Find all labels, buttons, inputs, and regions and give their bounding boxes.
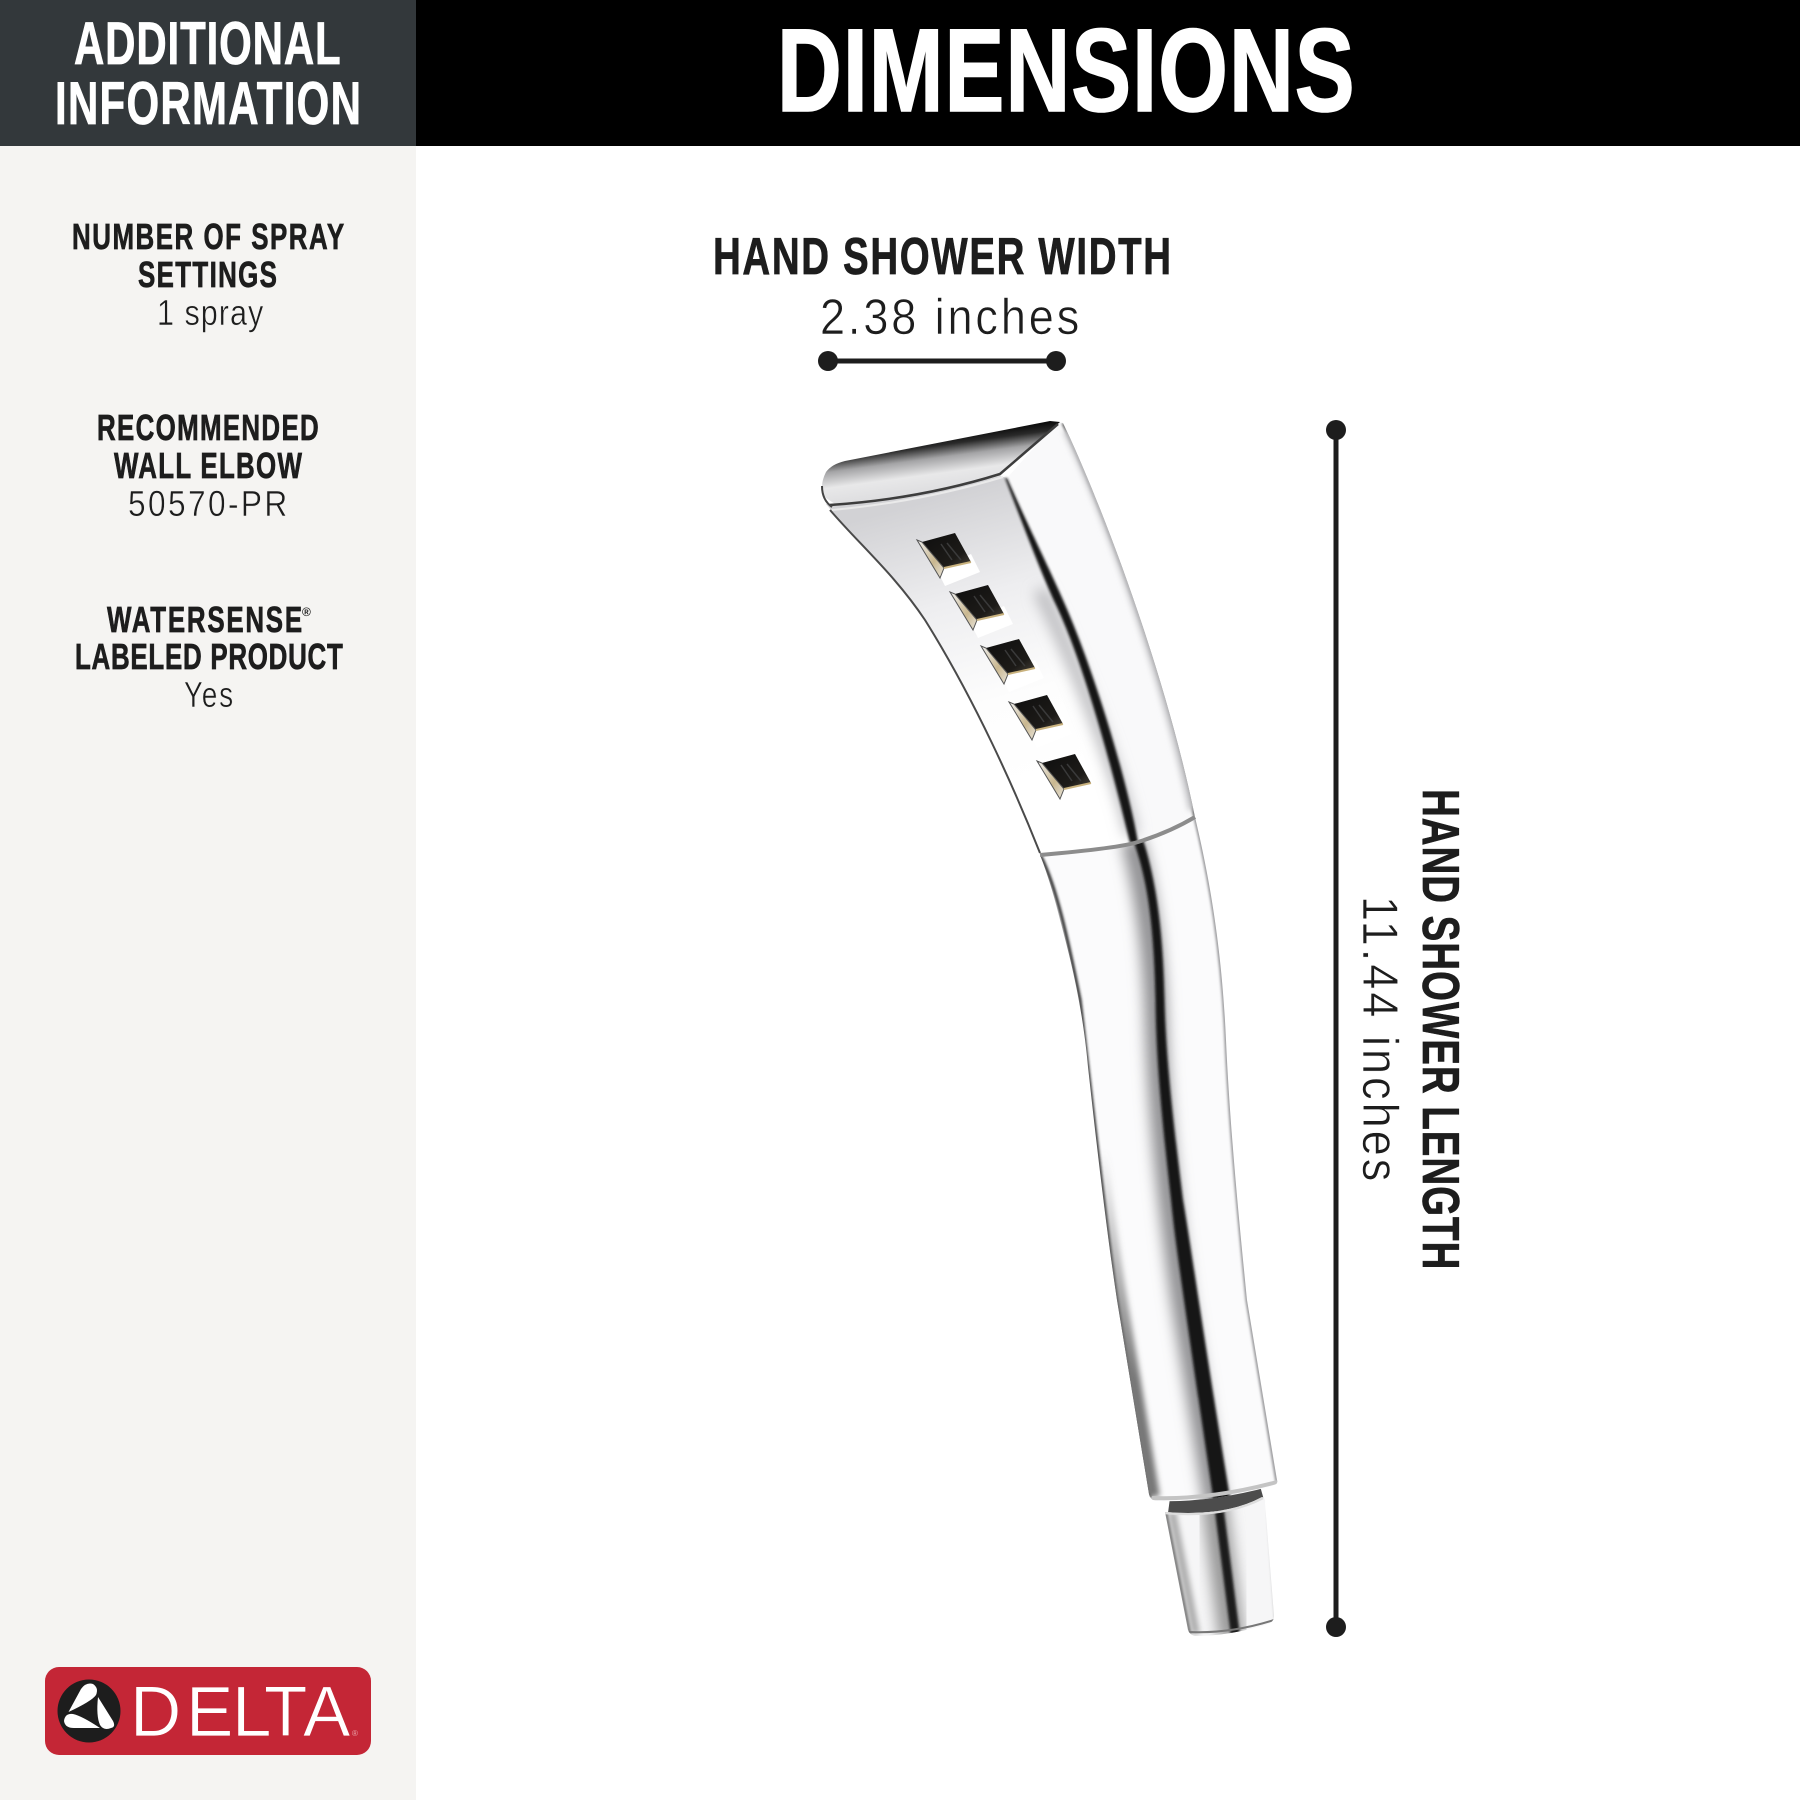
nozzle 4 (1009, 695, 1072, 748)
header: additional information (0, 0, 416, 146)
hand shower product (822, 421, 1277, 1640)
width dimension label: HAND SHOWER WIDTH (713, 227, 1171, 285)
logo: delta: ® (352, 1729, 358, 1738)
spec: number of spray settings: NUMBER OF SPRAY (72, 217, 344, 257)
head top face (822, 421, 1060, 510)
spec: watersense labeled product (75, 600, 343, 715)
logo: delta: DELTA (130, 1673, 351, 1752)
nozzle 1 (917, 533, 980, 586)
spec: recommended wall elbow (97, 408, 319, 524)
spec: recommended wall elbow: 50570-PR (128, 484, 287, 524)
nozzle 3 (981, 639, 1044, 692)
left information panel (0, 146, 416, 1800)
length dimension label (1351, 789, 1470, 1269)
length dimension line (1326, 420, 1346, 1637)
groove between head and handle (1040, 817, 1195, 855)
header: additional information: INFORMATION (55, 70, 361, 137)
header: additional information: ADDITIONAL (74, 10, 341, 77)
header: dimensions title (416, 0, 1800, 146)
spec: watersense labeled product: Yes (184, 675, 233, 715)
width dimension label: 2.38 inches (820, 290, 1079, 346)
length dimension label: 11.44 inches (1351, 896, 1407, 1181)
threaded gap between handle and collar (1168, 1486, 1264, 1513)
head side panel (1005, 422, 1195, 843)
spec: watersense labeled product: ® (302, 605, 311, 619)
spec: number of spray settings (72, 217, 344, 334)
spec: number of spray settings: 1 spray (157, 294, 264, 334)
head face with spray nozzles (826, 476, 1138, 855)
width dimension label (713, 227, 1171, 346)
handle (1040, 817, 1277, 1510)
nozzle 5 (1037, 754, 1100, 807)
header: dimensions title: DIMENSIONS (777, 5, 1355, 137)
nozzle 2 (950, 585, 1013, 638)
spec: number of spray settings: SETTINGS (138, 255, 277, 295)
spec: watersense labeled product: WATERSENSE (107, 600, 302, 640)
length dimension label: HAND SHOWER LENGTH (1412, 789, 1470, 1269)
logo: delta (45, 1667, 371, 1755)
icon: delta triangle mark (58, 1680, 120, 1742)
spec: watersense labeled product: LABELED PRODUCT (75, 637, 343, 677)
spec: recommended wall elbow: RECOMMENDED (97, 408, 319, 448)
collar connector (1165, 1497, 1276, 1640)
width dimension line (818, 351, 1066, 371)
spec: recommended wall elbow: WALL ELBOW (114, 446, 302, 486)
